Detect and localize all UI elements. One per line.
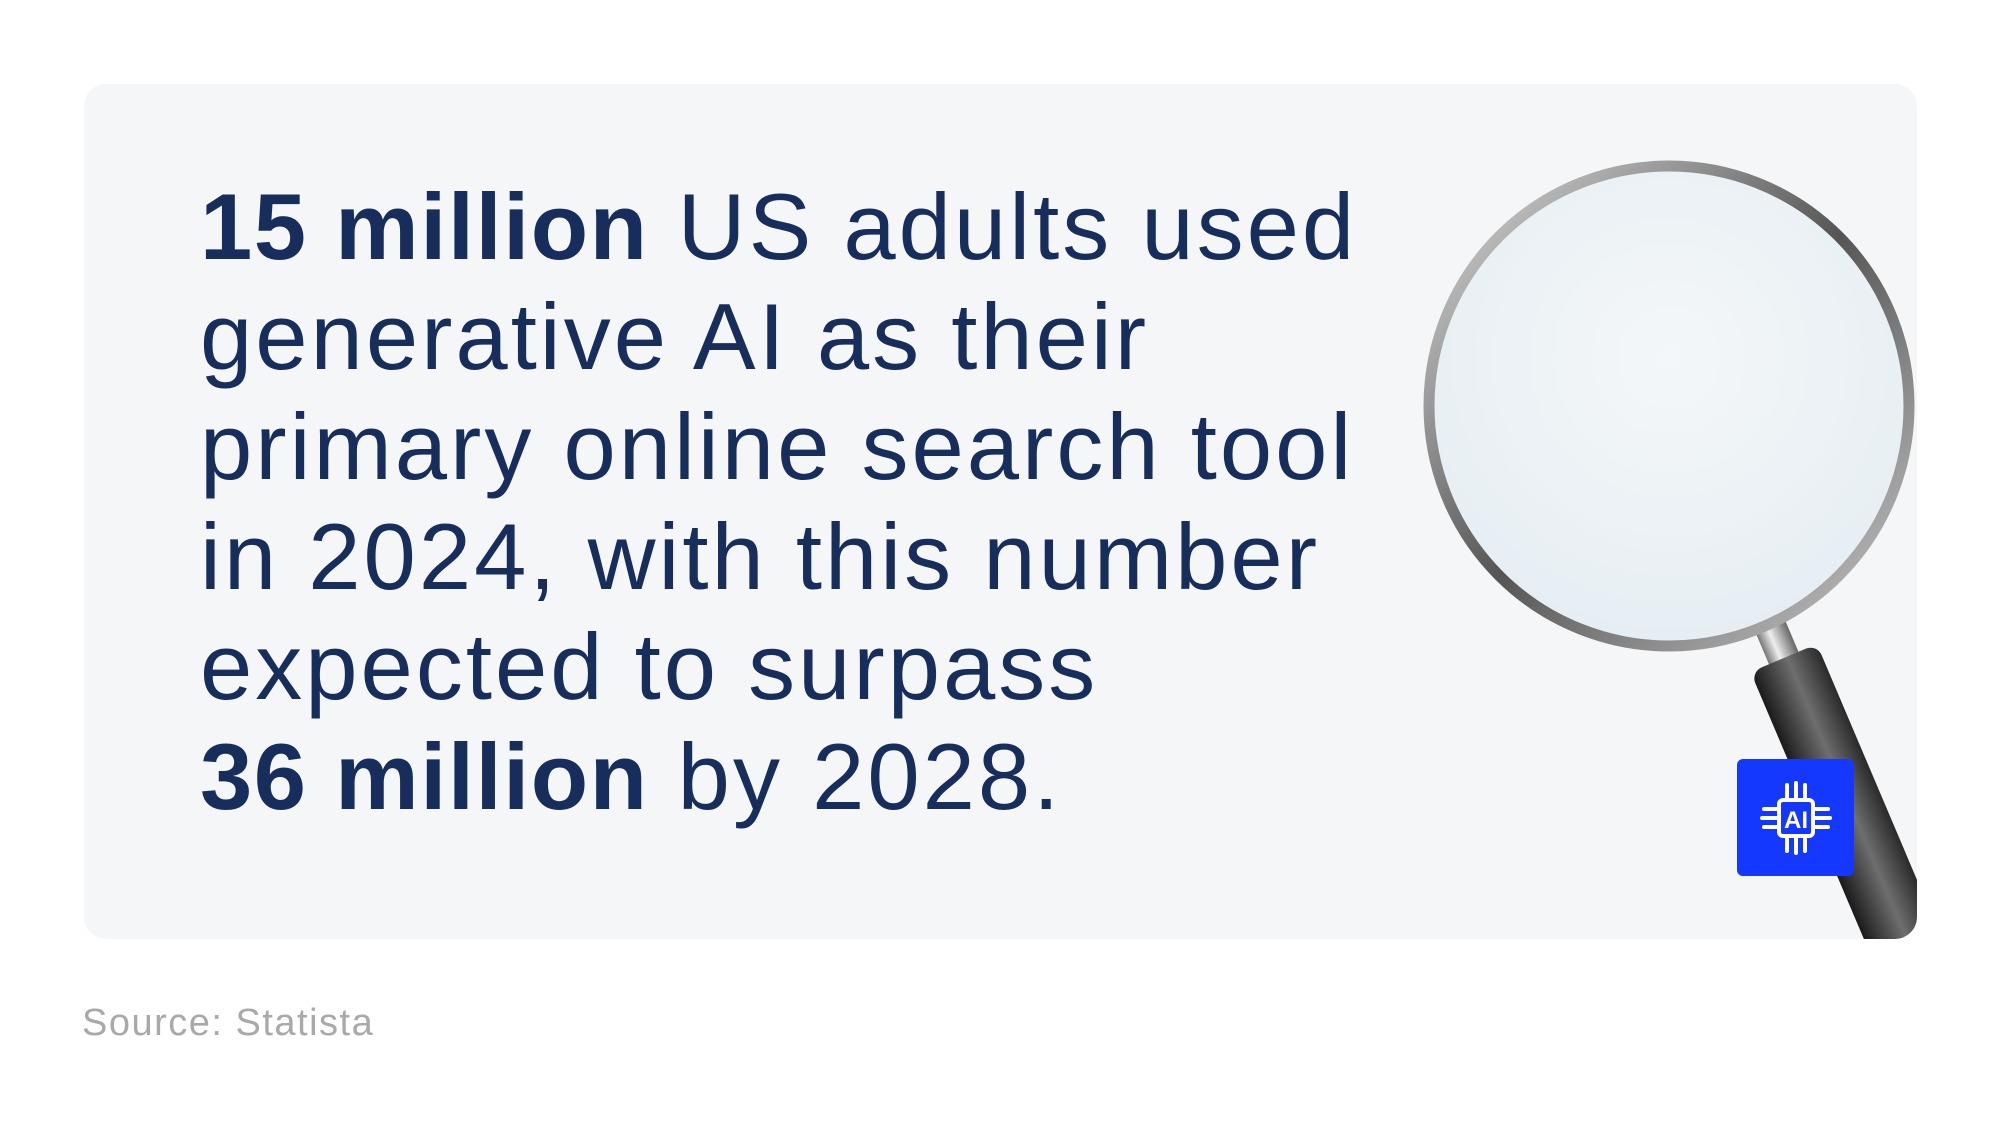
source note: Source: Statista: [82, 1002, 374, 1044]
text block: statistic: expected to surpass: [200, 614, 1098, 719]
text block: statistic: primary online search tool: [200, 394, 1354, 499]
icon: AI chip badge: [1737, 759, 1854, 876]
text block: statistic: 36 million by 2028.: [200, 724, 1062, 829]
icon: AI chip badge: AI: [1784, 807, 1808, 834]
handle: [1754, 622, 1917, 939]
lens: [1429, 166, 1909, 646]
text block: statistic: in 2024, with this number: [200, 504, 1320, 609]
icon: magnifying glass with AI badge: [1424, 160, 1917, 939]
panel: main card: [84, 84, 1917, 939]
text block: statistic: [200, 174, 1357, 829]
text block: statistic: 15 million US adults used: [200, 174, 1357, 279]
text block: statistic: generative AI as their: [200, 284, 1149, 389]
